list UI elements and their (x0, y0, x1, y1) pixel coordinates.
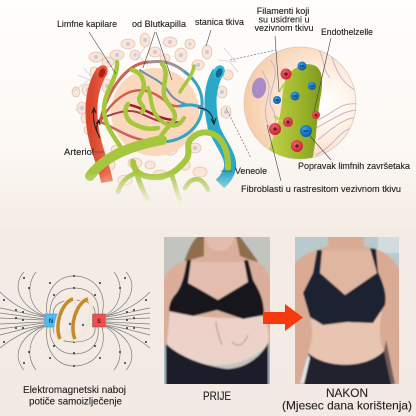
chest (183, 262, 250, 300)
label: Fibroblasti: Fibroblasti u rastresitom vezivnom tkivu (241, 184, 401, 194)
arteriole arrows (92, 108, 216, 138)
bra (303, 248, 386, 325)
skin: torso and arms (160, 236, 274, 350)
charges (269, 62, 320, 152)
S magnet pole: S (97, 319, 101, 325)
magnet caption: Elektromagnetski naboj (23, 385, 126, 396)
label: od Blutkapilla: od Blutkapilla (132, 19, 187, 29)
arteriole (91, 63, 110, 182)
photo: after (295, 237, 399, 384)
label: stanica tkiva: stanica tkiva (195, 17, 245, 27)
arm gaps (300, 354, 310, 384)
fibroblast fibres (72, 46, 238, 110)
leader lines (89, 30, 331, 181)
central capillary bed (111, 68, 199, 156)
label: Filamenti: Filamenti koji (257, 6, 309, 16)
N magnet pole (44, 314, 58, 327)
cell nuclei (80, 38, 228, 152)
shorts (300, 351, 392, 388)
label: Endothelzelle: Endothelzelle (321, 27, 373, 37)
label: Popravak limfnih završetaka: Popravak limfnih završetaka (298, 161, 411, 171)
bra (169, 260, 264, 319)
fibres (262, 48, 358, 160)
N magnet pole: N (49, 319, 53, 325)
magnetic field diagram (0, 272, 150, 370)
lymph capillaries (90, 62, 228, 200)
label: Arteriol: Arteriol (64, 147, 94, 157)
chest (320, 250, 376, 294)
hair (184, 237, 258, 263)
venule (211, 63, 230, 184)
S magnet pole (92, 314, 106, 327)
label: Filamenti: su usidreni u (258, 14, 310, 24)
vessel body (269, 64, 322, 160)
label: Filamenti: vezivnom tkivu (254, 23, 314, 33)
diagram: lymphatic capillaries (72, 33, 238, 200)
magnet caption: potiče samoizlječenje (29, 396, 122, 408)
caption: PRIJE: PRIJE (203, 391, 231, 403)
photo: before (164, 237, 270, 384)
skin: neck, shoulders, arms (295, 237, 399, 384)
field lines (0, 272, 150, 370)
gold rings (52, 296, 95, 342)
lower corners (164, 342, 270, 384)
shorts (166, 343, 268, 388)
arrow: before to after (263, 304, 303, 331)
belly (167, 312, 269, 365)
purple cell (252, 78, 266, 98)
tissue cells (72, 33, 233, 185)
caption: NAKON: NAKON (326, 386, 368, 400)
field line dots (3, 275, 147, 367)
inset: lymphatic capillary detail (226, 47, 358, 160)
label: Limfne kapilare: Limfne kapilare (57, 19, 117, 29)
caption: NAKON: (Mjesec dana korištenja) (282, 398, 412, 412)
label: Veneole: Veneole (235, 166, 267, 176)
blood capillaries (100, 61, 208, 142)
dashed zoom lines (226, 50, 276, 158)
midriff (308, 312, 384, 365)
